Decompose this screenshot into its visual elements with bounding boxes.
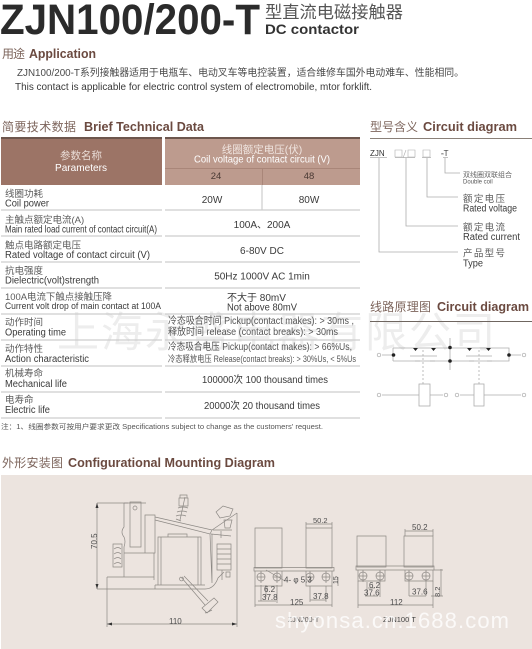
heading: brief technical data: 简要技术数据 [2,119,76,134]
application text: This contact is applicable for electric control system of electromobile, mtor forklift. [15,82,372,93]
table header: 参数名称 [60,149,102,162]
drawing: ZJN200-T front view [254,516,340,624]
drawing: side view [90,495,237,627]
row: main rated current: 主触点额定电流(A) [5,214,84,226]
drawing: ZJN100-T front view: 37.6 [412,588,428,596]
drawing: side view: 110 [169,617,182,626]
drawing: ZJN200-T front view: 50.2 [313,516,328,525]
heading: mounting diagram: Configurational Mounting Diagram [68,455,275,470]
heading: model meaning [370,119,532,139]
row: action characteristic [5,340,356,365]
heading: brief technical data: Brief Technical Data [84,119,205,134]
table: technical data [1,137,360,418]
drawing: ZJN100-T front view [356,523,443,624]
dimension lines [97,503,237,627]
row: coil power: Coil power [5,198,50,210]
row: volt drop: Current volt drop of main contact at 100A [5,301,161,311]
circuit schematic [377,338,526,406]
table header: 24 [211,171,221,182]
row: electric life: 电寿命 [5,394,34,406]
drawing: ZJN100-T front view: 6.2 [369,581,381,590]
row: coil power [5,188,320,210]
heading: model meaning: Circuit diagram [423,119,517,134]
model code diagram: 额定电压 [463,193,505,205]
table header: 48 [304,171,314,182]
row: volt drop [5,291,297,314]
row: main rated current [5,214,291,236]
heading: circuit diagram: Circuit diagram [437,299,529,314]
heading: application: Application [29,46,96,61]
drawing: ZJN100-T front view: 8.2 [433,587,442,597]
drawing: ZJN200-T front view: 15 [333,576,340,584]
heading: mounting diagram: 外形安装图 [2,455,63,470]
title: 型直流电磁接触器 [265,3,403,22]
model code diagram: Rated current [463,232,520,243]
heading: model meaning: 型号含义 [370,119,418,134]
row: coil power: 80W [299,195,320,206]
row: mechanical life: 机械寿命 [5,368,44,380]
heading: circuit diagram [370,299,532,322]
title: DC contactor [265,21,360,37]
drawing: ZJN200-T front view: ZJN200-T [288,617,320,624]
model code diagram: Rated voltage [463,204,517,214]
table header: Parameters [55,162,107,174]
row: dielectric strength: 抗电强度 [5,265,44,277]
model code diagram: 双线圈双联组合 [463,170,512,179]
row: operating time: 冷态吸合时间 Pickup(contact makes): > 30ms , [168,314,354,327]
watermark: company name: 上海永盛电器有限公司 [57,309,497,356]
row: rated voltage: Rated voltage of contact circuit (V) [5,250,150,261]
watermark: site url: shyonsa.cn.1688.com [275,608,509,633]
row: volt drop: Not above 80mV [227,302,297,314]
row: rated voltage [5,240,284,261]
row: dielectric strength [5,265,310,286]
application text [15,66,464,93]
row: operating time: 释放时间 release (contact breaks): > 30ms [168,325,338,338]
row: action characteristic: 动作特性 [5,343,44,355]
model code diagram: Double coil [463,180,493,186]
model code diagram: 产品型号 [463,248,505,260]
row: mechanical life [5,368,328,390]
table header: 线圈额定电压(伏) [222,143,302,156]
heading: brief technical data [2,119,205,134]
table header: Coil voltage of contact circuit (V) [194,154,330,166]
panel: mounting diagram background [1,475,532,649]
row: action characteristic: 冷态吸合电压 Pickup(contact makes): > 66%Us, [168,340,352,353]
row: rated voltage: 6-80V DC [240,246,284,257]
drawing: side view: 70.5 [90,533,99,549]
footnote: 注：1、线圈参数可按用户要求更改 Specifications subject to change as the customers' request. [1,422,323,431]
drawing: ZJN100-T front view: 50.2 [412,523,428,532]
drawing: ZJN200-T front view: 6.2 [264,585,276,594]
row dividers [1,185,360,418]
row: coil power: 线圈功耗 [5,188,44,200]
model code diagram [370,149,520,270]
row: volt drop: 100A电流下触点接触压降 [5,291,112,303]
model code diagram: 额定电流 [463,222,505,234]
row: operating time [5,314,354,338]
drawing: ZJN200-T front view: 37.8 [262,593,278,602]
contactor body [107,502,205,589]
row: volt drop: 不大于 80mV [227,291,286,304]
drawing: ZJN200-T front view: 4- φ 5.3 [284,576,312,584]
application text: ZJN100/200-T系列接触器适用于电瓶车、电动叉车等电控装置，适合维修车国外电动难车、性能相同。 [17,66,464,79]
heading: application [2,46,96,61]
row: operating time: Operating time [5,328,66,338]
row: dielectric strength: 50Hz 1000V AC 1min [214,272,310,282]
title [0,0,403,44]
row: dielectric strength: Dielectric(volt)strength [5,276,99,286]
model code diagram: Type [463,258,483,270]
heading: circuit diagram: 线路原理图 [370,299,431,314]
row: main rated current: 100A、200A [234,220,291,231]
row: action characteristic: 冷态释放电压 Release(contact breaks): > 30%Us, < 5%Us [168,353,356,364]
drawing: ZJN100-T front view: ZJN100 T [383,615,416,624]
model code diagram: ZJN [370,149,385,158]
row: mechanical life: 100000次 100 thousand times [202,373,328,386]
row: electric life: 20000次 20 thousand times [204,399,320,412]
drawing: ZJN200-T front view: 125 [290,598,304,607]
row: main rated current: Main rated load current of contact circuit(A) [5,224,157,236]
drawing: ZJN100-T front view: 37.6 [364,588,380,598]
row: operating time: 动作时间 [5,316,43,328]
row: rated voltage: 触点电路额定电压 [5,240,82,252]
row: coil power: 20W [202,195,223,206]
heading: application: 用途 [2,46,25,61]
model code diagram: -T [441,149,449,158]
row: electric life: Electric life [5,405,50,416]
drawing: ZJN200-T front view: 37.8 [313,592,329,601]
row: electric life [5,394,320,416]
row: mechanical life: Mechanical life [5,379,67,390]
table header [1,137,360,185]
drawing: ZJN100-T front view: 112 [390,598,403,607]
row: action characteristic: Action characteristic [5,354,89,365]
